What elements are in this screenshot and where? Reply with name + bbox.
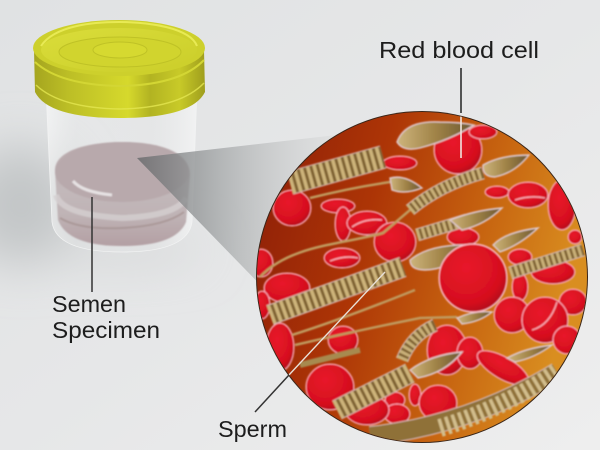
specimen jar (33, 20, 205, 252)
jar body (46, 90, 197, 252)
label: red blood cell: Red blood cell (379, 37, 539, 63)
far red blood cells (249, 125, 587, 425)
jar shadow (0, 145, 205, 265)
lid skirt (34, 50, 205, 118)
pointer: semen specimen (91, 197, 93, 292)
sperm midpieces (270, 157, 583, 436)
sperm pointer, inside circle (288, 272, 385, 376)
pointer: sperm (255, 375, 289, 412)
magnification cone (137, 134, 345, 300)
lid top (33, 20, 205, 76)
sperm tails (260, 182, 457, 345)
label: semen specimen: Semen (52, 291, 126, 317)
label: semen specimen: Specimen (52, 317, 160, 343)
label: sperm: Sperm (218, 416, 287, 442)
magnified circle (249, 105, 595, 450)
red cell pointer, inside circle (460, 112, 462, 158)
semen specimen liquid (55, 142, 190, 246)
sperm midpiece outlines (270, 157, 583, 436)
large red blood cell (439, 244, 507, 312)
label: semen specimen (52, 291, 160, 343)
cell highlights (330, 197, 557, 330)
sperm heads (390, 122, 552, 378)
pointer: red blood cell (460, 68, 462, 113)
